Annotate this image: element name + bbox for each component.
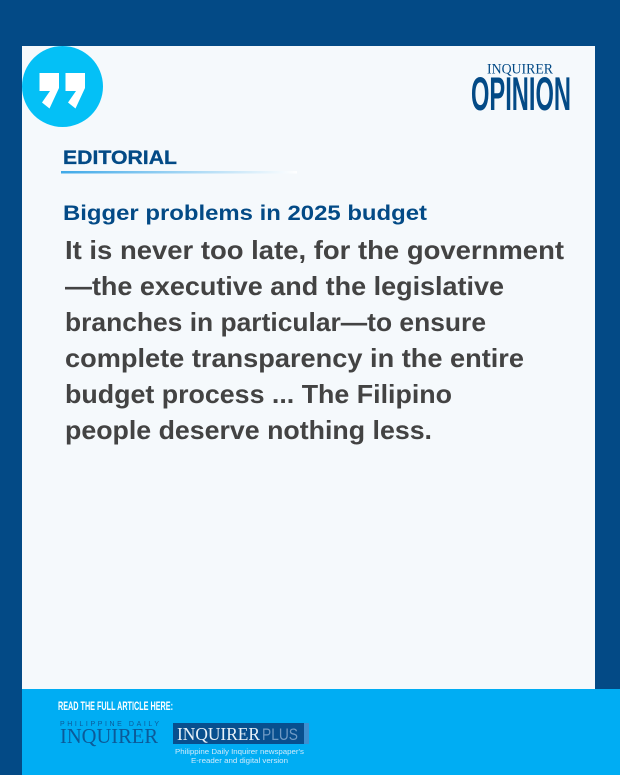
quote text: budget process ... The Filipino [65, 379, 452, 409]
quote text: branches in particular—to ensure [65, 307, 486, 337]
quote text: It is never too late, for the government [65, 235, 564, 265]
quote text: people deserve nothing less. [65, 415, 432, 445]
icon: quotation mark badge [22, 46, 103, 127]
logo: Inquirer Plus: INQUIRER [177, 724, 260, 744]
quote text [65, 235, 564, 445]
logo caption: Philippine Daily Inquirer newspaper's [175, 747, 304, 756]
quote text: complete transparency in the entire [65, 343, 524, 373]
logo: Inquirer Opinion: INQUIRER [487, 62, 553, 78]
logo: Philippine Daily Inquirer: PHILIPPINE DAILY [60, 721, 159, 728]
underline rule [61, 171, 297, 174]
quote text: —the executive and the legislative [65, 271, 504, 301]
footer call to action: READ THE FULL ARTICLE HERE: [58, 699, 173, 713]
logo: Philippine Daily Inquirer: INQUIRER [60, 724, 158, 748]
heading: editorial: EDITORIAL [63, 148, 177, 169]
logo: Inquirer Plus: PLUS [262, 726, 298, 744]
logo: Inquirer Opinion [471, 62, 571, 120]
logo caption: E-reader and digital version [191, 756, 288, 765]
panel: footer band [22, 689, 620, 775]
logo caption [175, 747, 304, 765]
panel: quote card [22, 46, 595, 689]
logo: Inquirer Plus [173, 723, 309, 744]
subheading: article title: Bigger problems in 2025 budget [63, 202, 427, 225]
